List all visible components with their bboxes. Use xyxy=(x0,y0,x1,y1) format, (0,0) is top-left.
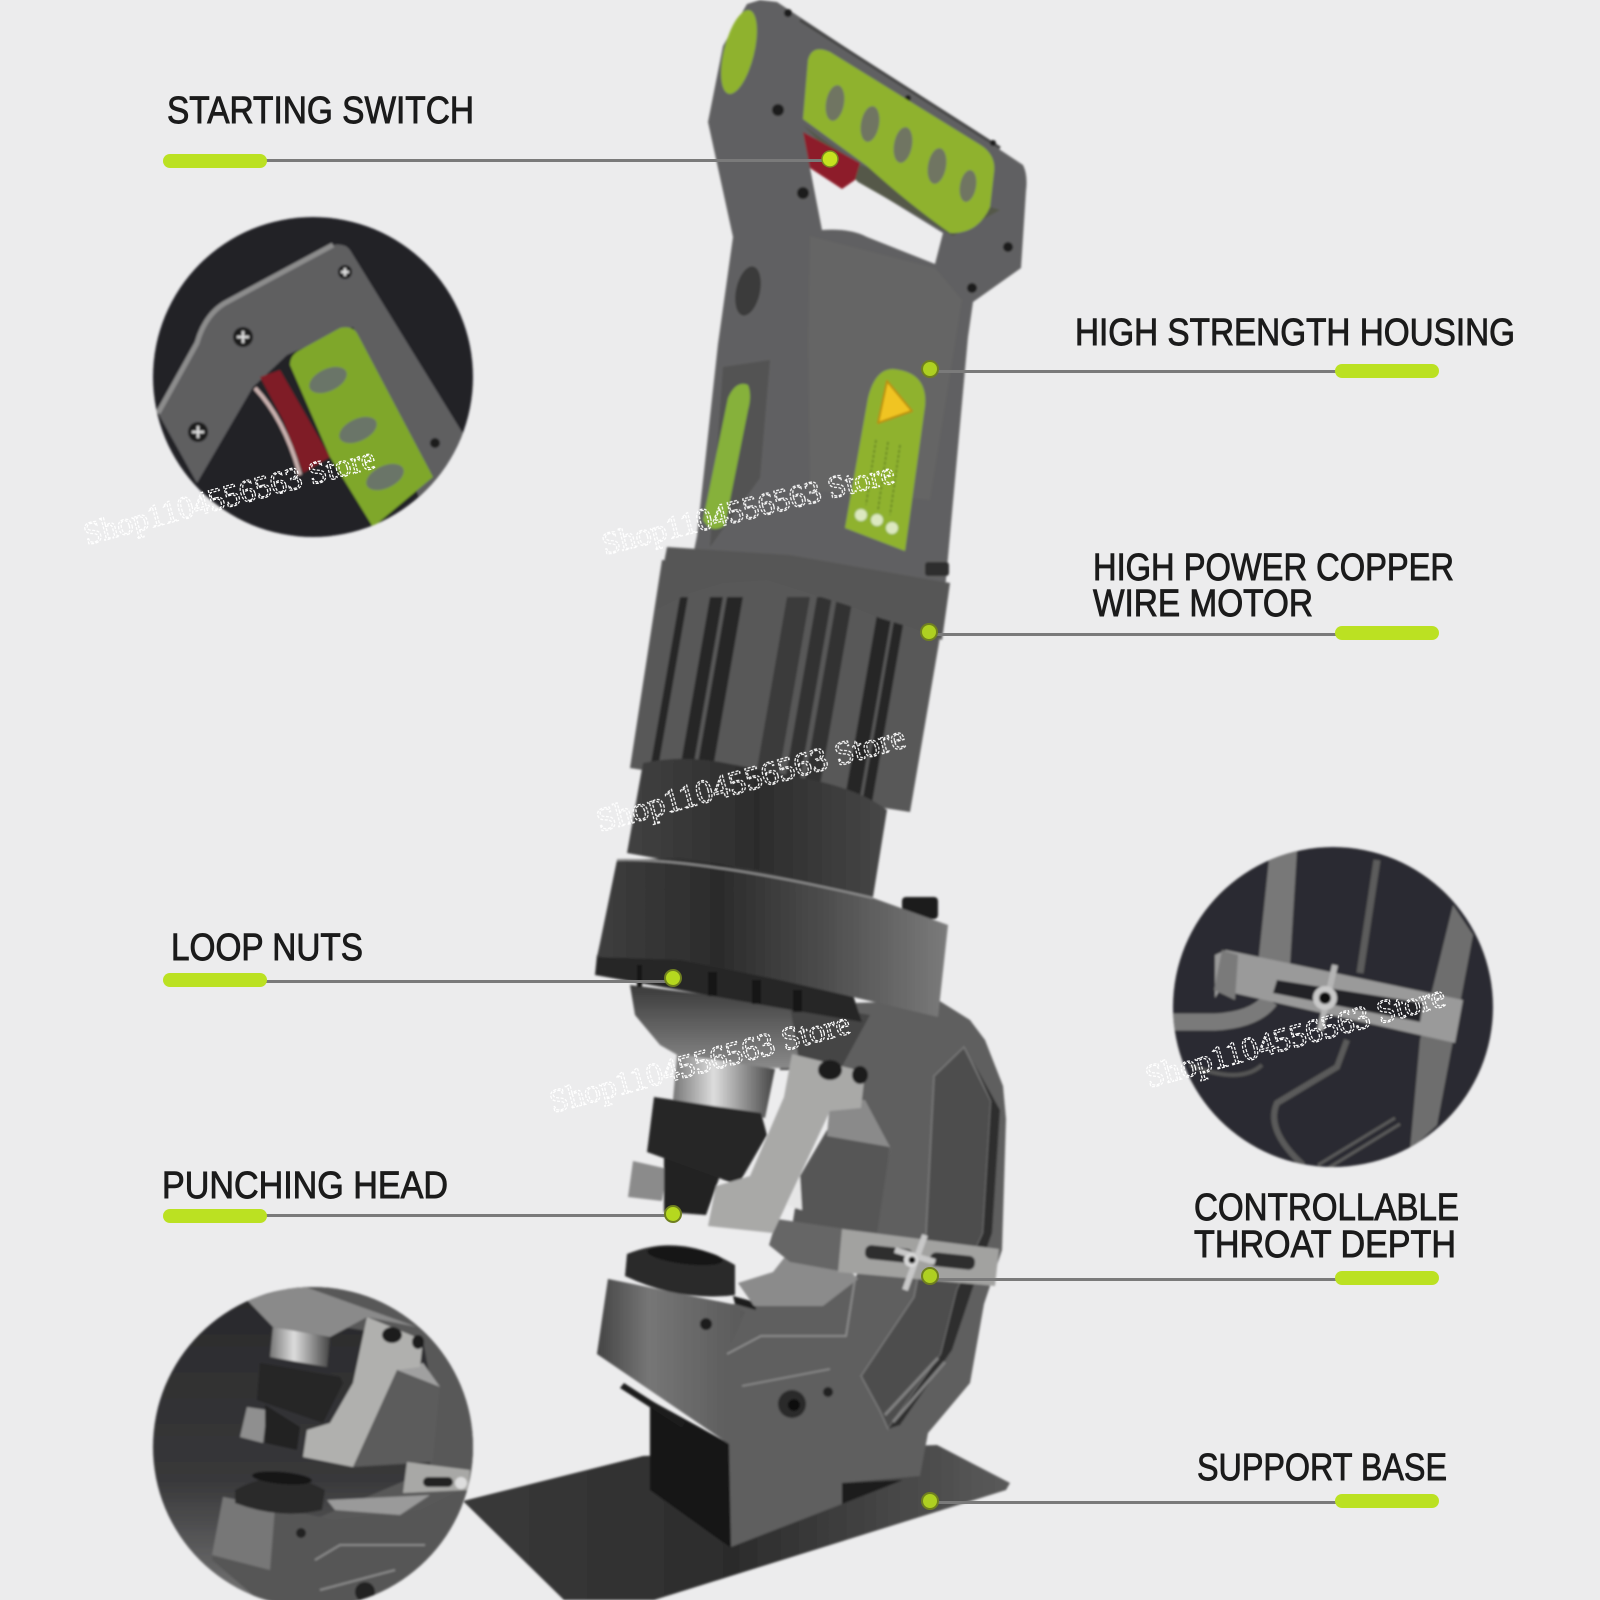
callout: controllable throat depth xyxy=(922,1187,1459,1285)
green grip xyxy=(290,327,433,527)
callout: controllable throat depth: CONTROLLABLE xyxy=(1194,1187,1459,1229)
punch tip xyxy=(628,1145,722,1215)
die ring xyxy=(625,1243,735,1296)
callout: high power copper wire motor: WIRE MOTOR xyxy=(1093,583,1313,625)
callout: high power copper wire motor: HIGH POWER COPPER xyxy=(1093,547,1454,589)
watermarks: Shop1104556563 Store xyxy=(79,439,379,552)
callout: high power copper wire motor xyxy=(921,547,1454,640)
ram cylinder xyxy=(673,1054,775,1118)
callout: punching head xyxy=(162,1165,681,1223)
callout: support base xyxy=(922,1447,1447,1509)
black column xyxy=(650,1400,731,1548)
support base plate xyxy=(463,1445,1010,1600)
callout: starting switch: STARTING SWITCH xyxy=(167,90,474,132)
watermarks: Shop1104556563 Store xyxy=(598,454,898,562)
green vent xyxy=(703,384,750,529)
cylinder body xyxy=(627,759,887,897)
flange xyxy=(597,858,948,1017)
end cap green xyxy=(714,7,764,97)
handle and housing body xyxy=(690,0,1027,590)
bracket bolts xyxy=(818,1060,868,1084)
callout: support base: SUPPORT BASE xyxy=(1197,1447,1447,1489)
warning label xyxy=(845,369,925,551)
screws xyxy=(772,9,1013,293)
callout: punching head: PUNCHING HEAD xyxy=(162,1165,448,1207)
watermarks: Shop1104556563 Store xyxy=(546,1006,854,1121)
throat interior xyxy=(738,1100,890,1306)
product: hydraulic punching tool xyxy=(463,0,1027,1600)
motor collar xyxy=(655,547,950,640)
detail circle: starting switch xyxy=(153,217,473,537)
callout: controllable throat depth: THROAT DEPTH xyxy=(1194,1224,1456,1266)
side port xyxy=(731,264,765,318)
cone under flange xyxy=(630,985,870,1070)
callout: high strength housing xyxy=(922,312,1515,378)
starting switch red xyxy=(803,132,860,189)
punch nut xyxy=(647,1097,767,1185)
callout: starting switch xyxy=(163,90,838,168)
green grip xyxy=(803,49,994,233)
depth stop arm xyxy=(838,1229,999,1290)
loop nuts xyxy=(595,955,862,1022)
watermarks: Shop1104556563 Store xyxy=(592,719,909,840)
callout: high strength housing: HIGH STRENGTH HOUSING xyxy=(1075,312,1515,354)
motor fins xyxy=(630,560,948,820)
watermarks xyxy=(79,439,1449,1121)
housing cap screw xyxy=(925,562,949,576)
light steel bracket xyxy=(708,1054,865,1233)
watermarks: Shop1104556563 Store xyxy=(1142,978,1449,1096)
lower grip band xyxy=(803,125,1000,236)
callout: loop nuts: LOOP NUTS xyxy=(171,927,363,969)
punching frame xyxy=(597,1000,1006,1547)
red switch xyxy=(260,370,330,473)
top knob xyxy=(902,897,938,919)
warning triangle xyxy=(878,381,912,423)
detail circle: throat depth xyxy=(1170,847,1493,1170)
screws xyxy=(188,265,440,448)
detail circle: punching head xyxy=(153,1285,480,1600)
handle corner xyxy=(158,245,470,500)
callout: loop nuts xyxy=(163,927,681,987)
